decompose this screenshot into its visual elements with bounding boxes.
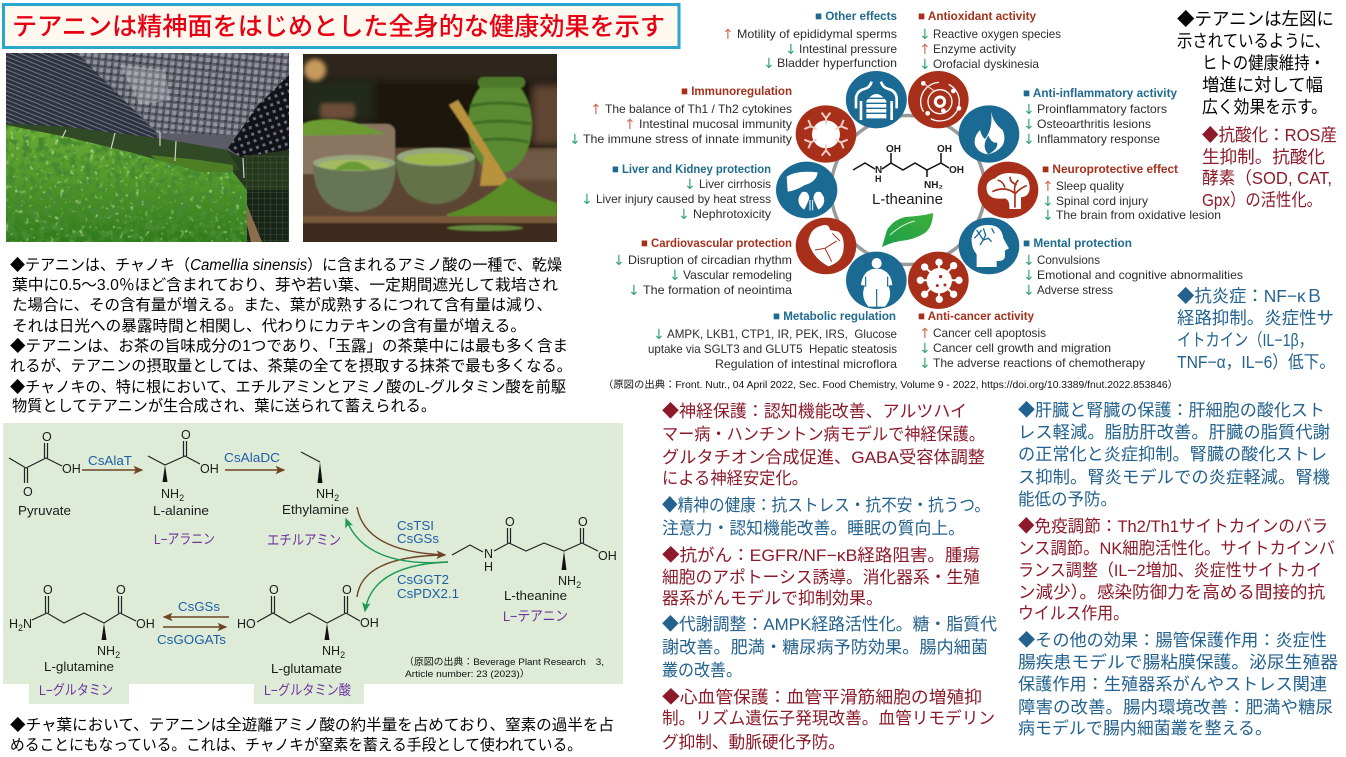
- text block: liver and kidney: [1018, 401, 1330, 509]
- L-theanine structure: NH: [558, 574, 576, 588]
- label: neuroprotective effect: Sleep quality: [1056, 179, 1124, 193]
- label: liver and kidney protection: ↓: [684, 177, 696, 193]
- L-alanine structure: NH: [161, 487, 179, 501]
- icon: anti-inflammatory flame: [959, 105, 1019, 163]
- text block: other effects: 保護作用：生殖器系がんやストレス関連: [1018, 675, 1327, 694]
- L-glutamate structure: 2: [340, 650, 345, 660]
- label: mental protection: Adverse stress: [1037, 283, 1113, 297]
- text block: immune regulation: [1018, 517, 1335, 623]
- text block: overview: [1177, 9, 1334, 117]
- text block: anti-cancer: 細胞のアポトーシス誘導。消化器系・生殖: [662, 568, 980, 587]
- icon: metabolic body: [846, 252, 907, 309]
- L-alanine structure: 2: [179, 493, 184, 503]
- L-glutamate structure: O: [269, 583, 279, 597]
- photo: shaded tea field under netting: [6, 53, 289, 242]
- label: anti-inflammatory activity: ↓: [1023, 102, 1035, 118]
- label: immunoregulation: The immune stress of innate immunity: [583, 132, 792, 146]
- text block: antioxidant: Gpx）の活性化。: [1202, 190, 1322, 210]
- text block: metabolic regulation: ◆代謝調整：AMPK経路活性化。糖・脂質代: [662, 615, 997, 634]
- text block: anti-inflammatory: ◆抗炎症：NF−κＢ: [1177, 286, 1323, 306]
- text block: anti-inflammatory: イトカイン（IL−1β，: [1177, 330, 1313, 350]
- label: immunoregulation: ↓: [569, 132, 581, 148]
- text block: neuroprotection: ◆神経保護：認知機能改善、アルツハイ: [662, 402, 967, 421]
- text block: metabolic regulation: 叢の改善。: [662, 661, 742, 680]
- title banner: テアニンは精神面をはじめとした全身的な健康効果を示す: [12, 13, 665, 41]
- text block: theanine description: ◆チャノキの、特に根において、エチルアミンとアミノ酸のL-グルタミン酸を前駆: [10, 378, 566, 396]
- label: neuroprotective effect: ■ Neuroprotective effect: [1042, 162, 1178, 176]
- center molecule: NH₂: [924, 180, 943, 191]
- arrow: CsAlaDC: [224, 451, 284, 470]
- label: anti-inflammatory activity: ↓: [1023, 117, 1035, 133]
- center molecule: OH: [937, 144, 952, 155]
- label: mental protection: ↓: [1023, 283, 1035, 299]
- arrows: CsGSs and CsGOGATs: [157, 600, 229, 647]
- L-theanine structure: OH: [598, 549, 617, 563]
- text block: antioxidant: ◆抗酸化：ROS産: [1202, 125, 1337, 145]
- label: anti-inflammatory activity: Osteoarthritis lesions: [1037, 117, 1151, 131]
- label: cardiovascular protection: ↓: [613, 253, 625, 269]
- text block: anti-cancer: ◆抗がん：EGFR/NF−κB経路阻害。腫瘍: [662, 546, 980, 565]
- L-theanine structure: O: [578, 515, 588, 529]
- text block: antioxidant: 酵素（SOD, CAT,: [1202, 168, 1332, 188]
- label: cardiovascular protection: The formation of neointima: [643, 283, 792, 297]
- L-alanine structure: L-alanine: [153, 504, 209, 518]
- label: antioxidant activity: [918, 9, 1061, 73]
- label: mental protection: ↓: [1023, 253, 1035, 269]
- label: liver and kidney protection: Nephrotoxicity: [693, 207, 771, 221]
- text block: anti-inflammatory: 経路抑制。炎症性サ: [1177, 308, 1334, 328]
- icon: other effects torso: [846, 71, 907, 128]
- label: neuroprotective effect: ↓: [1042, 208, 1054, 224]
- label: liver and kidney protection: ↓: [581, 192, 593, 208]
- text block: mental health: [662, 496, 990, 538]
- label: anti-inflammatory activity: ↓: [1023, 132, 1035, 148]
- icon: neuroprotective brain: [978, 162, 1038, 218]
- arrow: CsAlaDC: CsAlaDC: [224, 451, 280, 465]
- text block: cardiovascular: 制。リズム遺伝子発現改善。血管リモデリン: [662, 708, 995, 728]
- label: metabolic regulation: ↓: [653, 327, 665, 343]
- label: anti-cancer activity: ■ Anti-cancer activity: [918, 309, 1034, 323]
- text block: anti-cancer: [662, 546, 980, 608]
- text block: cardiovascular: グ抑制、動脈硬化予防。: [662, 733, 845, 752]
- label: anti-cancer activity: Cancer cell growth and migration: [933, 341, 1111, 355]
- L-alanine structure: [148, 428, 219, 547]
- arrows: theanine synthesis and breakdown: [346, 507, 459, 611]
- label: immunoregulation: [569, 84, 792, 148]
- text block: immune regulation: ウイルス作用。: [1018, 604, 1129, 623]
- text block: antioxidant: 生抑制。抗酸化: [1202, 147, 1325, 167]
- panel: theanine biosynthesis pathway: [3, 423, 623, 704]
- label: immunoregulation: ■ Immunoregulation: [681, 84, 792, 98]
- L-glutamine structure: O: [43, 583, 53, 597]
- label: liver and kidney protection: [581, 162, 771, 223]
- title banner: [4, 4, 679, 48]
- label: anti-cancer activity: The adverse reactions of chemotherapy: [933, 356, 1145, 370]
- pyruvate structure: [9, 430, 81, 518]
- label: liver and kidney protection: ↓: [678, 207, 690, 223]
- text block: other effects: 腸疾患モデルで腸粘膜保護。泌尿生殖器: [1018, 652, 1338, 672]
- label: neuroprotective effect: Spinal cord injury: [1056, 194, 1148, 208]
- L-glutamine structure: N: [23, 617, 32, 631]
- label: neuroprotective effect: ↑: [1042, 179, 1054, 195]
- text block: mental health: 注意力・認知機能改善。睡眠の質向上。: [662, 519, 965, 538]
- text block: anti-inflammatory: [1177, 286, 1335, 372]
- label: cardiovascular protection: Disruption of circadian rhythm: [628, 253, 792, 267]
- L-alanine structure: OH: [200, 462, 219, 476]
- L-glutamate structure: L-glutamate: [271, 662, 342, 676]
- label: liver and kidney protection: Liver cirrhosis: [699, 177, 771, 191]
- text block: neuroprotection: グルタチオン合成促進、GABA受容体調整: [662, 448, 985, 467]
- label: metabolic regulation: AMPK, LKB1, CTP1, IR, PEK, IRS, Glucose: [667, 327, 897, 341]
- L-glutamate structure: OH: [360, 616, 379, 630]
- label: anti-cancer activity: ↓: [919, 341, 931, 357]
- icon: immunoregulation antibodies: [796, 105, 856, 163]
- label: cardiovascular protection: ■ Cardiovascular protection: [641, 236, 792, 250]
- text block: overview: 示されているように、: [1177, 31, 1330, 51]
- text block: mental health: ◆精神の健康：抗ストレス・抗不安・抗うつ。: [662, 496, 990, 515]
- text block: neuroprotection: による神経安定化。: [662, 469, 808, 488]
- arrows: theanine synthesis and breakdown: CsTSI: [397, 519, 434, 533]
- label: cardiovascular protection: [613, 236, 792, 299]
- label: antioxidant activity: Orofacial dyskinesia: [933, 57, 1039, 71]
- center molecule: OH: [949, 165, 964, 176]
- L-glutamine structure: 2: [18, 623, 23, 633]
- diagram: L-theanine health effects wheel: [569, 9, 1243, 372]
- arrows: theanine synthesis and breakdown: CsGGT2: [397, 573, 449, 587]
- L-theanine structure: L−テアニン: [503, 608, 568, 624]
- text block: antioxidant: [1202, 125, 1337, 210]
- label: anti-inflammatory activity: Proinflammatory factors: [1037, 102, 1167, 116]
- text block: liver and kidney: 能低の予防。: [1018, 490, 1117, 509]
- photo: matcha bowls on tray: [303, 54, 557, 242]
- text block: other effects: [1018, 631, 1338, 738]
- label: anti-cancer activity: [918, 309, 1145, 372]
- text block: metabolic regulation: [662, 615, 997, 680]
- label: metabolic regulation: uptake via SGLT3 and GLUT5 Hepatic steatosis: [648, 342, 897, 356]
- L-glutamine structure: H: [9, 617, 18, 631]
- label: neuroprotective effect: [1042, 162, 1221, 224]
- label: anti-cancer activity: Cancer cell apoptosis: [933, 326, 1046, 340]
- icon: mental protection head: [959, 218, 1019, 274]
- pyruvate structure: O: [23, 485, 33, 499]
- label: mental protection: ↓: [1023, 268, 1035, 284]
- label: neuroprotective effect: ↓: [1042, 194, 1054, 210]
- label: other effects: ↓: [763, 56, 775, 72]
- label: other effects: [722, 9, 897, 72]
- text block: overview: 広く効果を示す。: [1202, 97, 1327, 117]
- text block: theanine description: 物質としてテアニンが生合成され、葉に送られて蓄えられる。: [12, 397, 436, 415]
- center molecule: N: [875, 165, 882, 176]
- L-glutamate structure: NH: [322, 644, 340, 658]
- icon: cardiovascular heart: [796, 218, 856, 274]
- text block: immune regulation: ン減少）。感染防御力を高める間接的抗: [1018, 583, 1325, 602]
- ethylamine structure: エチルアミン: [267, 532, 341, 548]
- text block: theanine description: [10, 256, 572, 415]
- label: immunoregulation: The balance of Th1 / Th2 cytokines: [605, 102, 792, 116]
- text block: immune regulation: ランス調整（IL−2増加、炎症性サイトカイ: [1018, 561, 1322, 580]
- text block: overview: 増進に対して幅: [1202, 75, 1323, 95]
- label: other effects: Bladder hyperfunction: [777, 56, 897, 70]
- label: cardiovascular protection: ↓: [628, 283, 640, 299]
- L-theanine structure: O: [505, 515, 515, 529]
- L-glutamine structure: L−グルタミン: [39, 682, 113, 698]
- ethylamine structure: 2: [334, 493, 339, 503]
- label: antioxidant activity: ■ Antioxidant activity: [918, 9, 1036, 23]
- text block: liver and kidney: ◆肝臓と腎臓の保護：肝細胞の酸化スト: [1018, 401, 1325, 420]
- icon: anti-cancer virus: [908, 252, 969, 309]
- L-theanine structure: [452, 515, 617, 624]
- label: antioxidant activity: Reactive oxygen species: [933, 27, 1061, 41]
- L-glutamate structure: O: [342, 583, 352, 597]
- text block: other effects: ◆その他の効果：腸管保護作用：炎症性: [1018, 631, 1327, 650]
- label: metabolic regulation: Regulation of intestinal microflora: [715, 357, 897, 371]
- text block: nitrogen storage note: [10, 716, 614, 754]
- text block: nitrogen storage note: ◆チャ葉において、テアニンは全遊離アミノ酸の約半量を占めており、窒素の過半を占: [10, 716, 614, 734]
- text block: theanine description: れるが、テアニンの摂取量としては、茶葉の全てを摂取する抹茶で最も多くなる。: [10, 357, 572, 375]
- label: anti-cancer activity: ↑: [919, 326, 931, 342]
- text block: metabolic regulation: 謝改善。肥満・糖尿病予防効果。腸内細菌: [662, 638, 988, 657]
- source citation: [404, 656, 604, 680]
- text block: other effects: 病モデルで腸内細菌叢を整える。: [1018, 718, 1272, 738]
- label: cardiovascular protection: Vascular remodeling: [683, 268, 792, 282]
- center molecule: H: [875, 174, 882, 184]
- label: anti-inflammatory activity: ■ Anti-inflammatory activity: [1023, 86, 1177, 100]
- label: metabolic regulation: [648, 309, 897, 371]
- connecting ring: [831, 116, 985, 264]
- label: antioxidant activity: ↓: [919, 57, 931, 73]
- text block: theanine description: た場合に、その含有量が増える。また、葉が成熟するにつれて含有量は減り、: [12, 296, 552, 314]
- pyruvate structure: OH: [62, 462, 81, 476]
- label: mental protection: Emotional and cognitive abnormalities: [1037, 268, 1243, 282]
- label: other effects: Motility of epididymal sperms: [737, 27, 897, 41]
- text block: overview: ヒトの健康維持・: [1202, 53, 1325, 73]
- L-alanine structure: L−アラニン: [154, 531, 215, 547]
- label: anti-inflammatory activity: Inflammatory response: [1037, 132, 1160, 146]
- label: immunoregulation: Intestinal mucosal immunity: [639, 117, 792, 131]
- pyruvate structure: Pyruvate: [18, 504, 71, 518]
- label: other effects: ■ Other effects: [815, 9, 897, 23]
- L-glutamate structure: [237, 583, 379, 698]
- text block: other effects: 障害の改善。腸内環境改善：肥満や糖尿: [1018, 698, 1333, 717]
- label: immunoregulation: ↑: [590, 102, 602, 118]
- label: cardiovascular protection: ↓: [669, 268, 681, 284]
- L-glutamine structure: 2: [115, 650, 120, 660]
- text block: neuroprotection: マー病・ハンチントン病モデルで神経保護。: [662, 424, 985, 444]
- L-alanine structure: O: [181, 428, 191, 442]
- text block: cardiovascular: [662, 688, 995, 752]
- arrow: CsAlaT: CsAlaT: [88, 454, 132, 468]
- L-glutamine structure: L-glutamine: [44, 660, 114, 674]
- text block: liver and kidney: レス軽減。脂肪肝改善。肝臓の脂質代謝: [1018, 423, 1330, 442]
- arrows: theanine synthesis and breakdown: CsGSs: [397, 532, 439, 546]
- label: other effects: ↑: [722, 27, 734, 43]
- L-glutamate structure: L−グルタミン酸: [264, 682, 351, 698]
- label: liver and kidney protection: ■ Liver and Kidney protection: [612, 162, 771, 176]
- label: mental protection: ■ Mental protection: [1023, 236, 1132, 250]
- label: anti-inflammatory activity: [1023, 86, 1177, 148]
- text block: nitrogen storage note: めることにもなっている。これは、チャノキが窒素を蓄える手段として使われている。: [10, 736, 582, 754]
- leaf: [882, 213, 933, 247]
- L-theanine structure: N: [484, 547, 493, 561]
- L-glutamine structure: OH: [136, 617, 155, 631]
- label: antioxidant activity: ↓: [919, 27, 931, 43]
- arrow: CsAlaT: [82, 454, 142, 470]
- label: neuroprotective effect: The brain from oxidative lesion: [1056, 208, 1221, 222]
- label: other effects: ↓: [785, 42, 797, 58]
- L-theanine structure: H: [484, 560, 493, 574]
- label: antioxidant activity: Enzyme activity: [933, 42, 1016, 56]
- L-theanine structure: L-theanine: [504, 589, 567, 603]
- source citation: （原図の出典：Beverage Plant Research 3,: [404, 656, 604, 668]
- center molecule: [853, 144, 964, 208]
- L-glutamine structure: [9, 583, 155, 698]
- label: liver and kidney protection: Liver injury caused by heat stress: [596, 192, 771, 206]
- ethylamine structure: Ethylamine: [282, 503, 349, 517]
- L-glutamate structure: HO: [237, 617, 256, 631]
- label: other effects: Intestinal pressure: [799, 42, 897, 56]
- pyruvate structure: O: [42, 430, 52, 444]
- label: antioxidant activity: ↑: [919, 42, 931, 58]
- text block: cardiovascular: ◆心血管保護：血管平滑筋細胞の増殖抑: [662, 688, 982, 707]
- L-glutamine structure: O: [116, 583, 126, 597]
- text block: theanine description: ◆テアニンは、チャノキ（Camellia sinensis）に含まれるアミノ酸の一種で、乾燥: [10, 256, 562, 274]
- text block: overview: ◆テアニンは左図に: [1177, 9, 1334, 29]
- arrows: CsGSs and CsGOGATs: CsGSs: [178, 600, 220, 614]
- text block: theanine description: 葉中に0.5～3.0％ほど含まれており、芽や若い葉、一定期間遮光して栽培され: [12, 276, 558, 294]
- text block: liver and kidney: ス抑制。腎炎モデルでの炎症軽減。腎機: [1018, 467, 1330, 487]
- text block: immune regulation: ◆免疫調節：Th2/Th1サイトカインのバラ: [1018, 517, 1328, 536]
- text block: theanine description: ◆テアニンは、お茶の旨味成分の1つであり、「玉露」の茶葉中には最も多く含ま: [10, 337, 568, 355]
- icon: antioxidant atom: [908, 71, 969, 128]
- text block: neuroprotection: [662, 402, 985, 488]
- label: mental protection: [1023, 236, 1243, 299]
- label: anti-cancer activity: ↓: [919, 356, 931, 372]
- L-glutamine structure: NH: [97, 644, 115, 658]
- center molecule: L-theanine: [872, 191, 943, 208]
- figure source citation: （原図の出典：Front. Nutr., 04 April 2022, Sec. Food Chemistry, Volume 9 - 2022, https://doi.org/10.3389/fnut.2022.853846）: [603, 378, 1178, 391]
- text block: liver and kidney: の正常化と炎症抑制。腎臓の酸化ストレ: [1018, 445, 1327, 464]
- text block: immune regulation: ンス調節。NK細胞活性化。サイトカインバ: [1018, 539, 1335, 558]
- text block: theanine description: それは日光への暴露時間と相関し、代わりにカテキンの含有量が増える。: [12, 317, 526, 335]
- center molecule: OH: [886, 144, 901, 155]
- icon: liver and kidneys: [776, 162, 837, 218]
- L-theanine structure: 2: [576, 580, 581, 590]
- label: metabolic regulation: ■ Metabolic regulation: [773, 309, 896, 323]
- arrows: theanine synthesis and breakdown: CsPDX2.1: [397, 587, 459, 601]
- text block: anti-cancer: 器系がんモデルで抑制効果。: [662, 588, 883, 608]
- source citation: Article number: 23 (2023)）: [405, 668, 530, 680]
- arrows: CsGSs and CsGOGATs: CsGOGATs: [157, 633, 226, 647]
- ethylamine structure: NH: [316, 487, 334, 501]
- label: mental protection: Convulsions: [1037, 253, 1100, 267]
- label: immunoregulation: ↑: [624, 117, 636, 133]
- ethylamine structure: [267, 452, 349, 548]
